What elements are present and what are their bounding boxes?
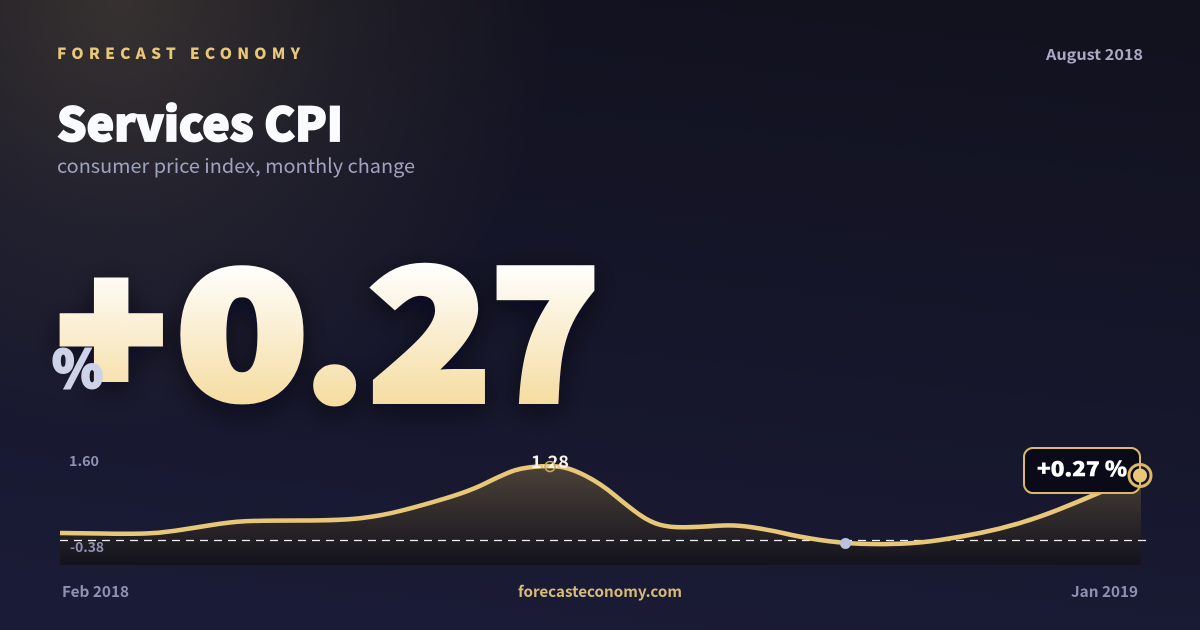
latest point marker — [1129, 464, 1151, 486]
subtitle: consumer price index, monthly change — [57, 150, 415, 179]
callout: latest value: +0.27 % — [1037, 453, 1127, 482]
percent unit: % — [52, 328, 103, 403]
baseline dashed — [60, 540, 1147, 542]
footer end date: Jan 2019 — [1071, 581, 1138, 602]
big value: . — [306, 221, 363, 445]
footer website: forecasteconomy.com — [518, 581, 682, 602]
big value: + — [59, 198, 164, 444]
big value: 7 — [492, 192, 599, 453]
chart area fill — [60, 466, 1141, 565]
line chart — [60, 448, 1151, 565]
low marker — [840, 538, 851, 549]
date: August 2018 — [1045, 44, 1143, 65]
peak marker — [545, 462, 555, 472]
brand eyebrow: FORECAST ECONOMY — [57, 42, 301, 64]
footer start date: Feb 2018 — [62, 581, 129, 602]
peak value label: 1.28 — [531, 448, 569, 473]
axis min label: -0.38 — [70, 536, 104, 556]
big value — [59, 191, 599, 453]
chart line — [60, 466, 1141, 544]
axis max label: 1.60 — [69, 450, 99, 470]
big value: 0 — [176, 197, 307, 449]
callout: latest value — [1024, 448, 1140, 493]
big value: 2 — [369, 191, 491, 452]
title: Services CPI — [57, 89, 343, 155]
